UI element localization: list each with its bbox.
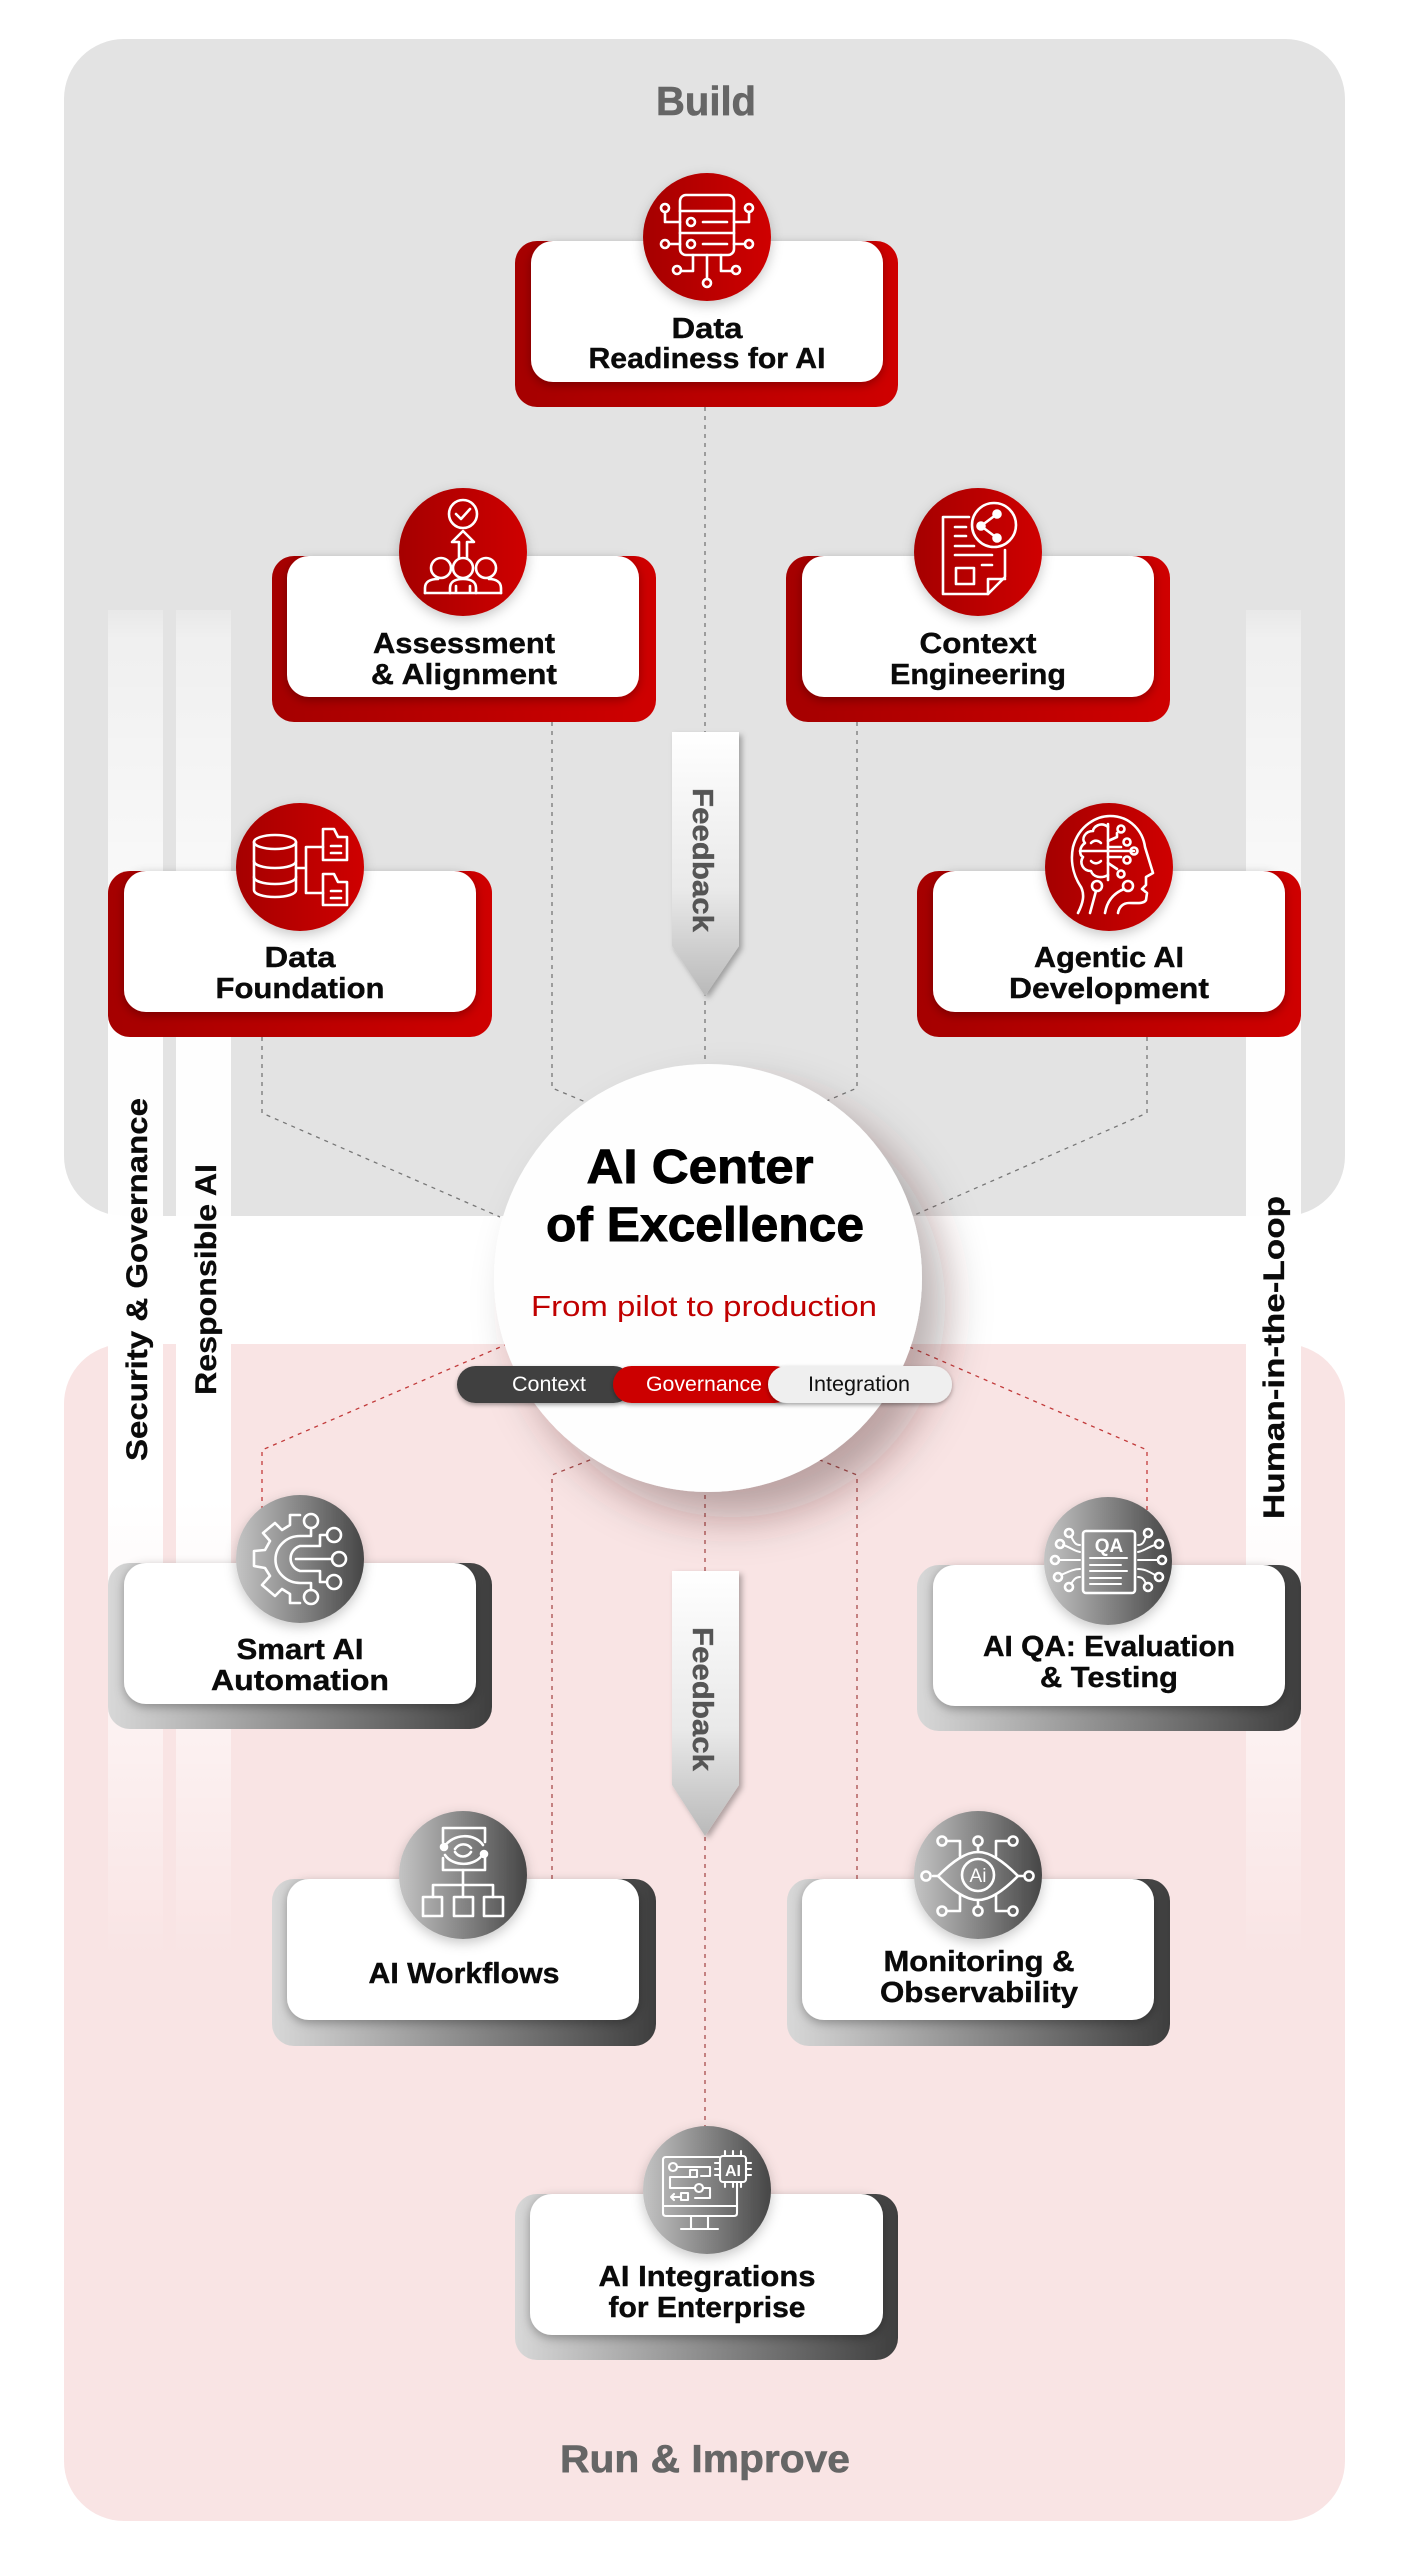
pill bar: Governance — [646, 1373, 762, 1396]
card: AI QA: Evaluation & Testing: & Testing — [1040, 1662, 1178, 1694]
card: Context Engineering: Engineering — [890, 659, 1066, 691]
card: Data Foundation: Foundation — [216, 973, 384, 1005]
arrow: Feedback bottom — [672, 1571, 739, 1836]
icon: AI eye: Ai — [970, 1866, 986, 1887]
icon: AI head — [1072, 816, 1153, 913]
hub circle — [494, 1064, 922, 1492]
card: AI Integrations for Enterprise — [515, 2126, 898, 2360]
arrow: Feedback top — [672, 732, 739, 996]
card: AI Workflows: AI Workflows — [368, 1958, 560, 1990]
card: Data Foundation: Data — [264, 942, 336, 974]
hub title — [546, 1141, 864, 1252]
icon: QA document circuit — [1051, 1529, 1166, 1593]
card: Smart AI Automation: Automation — [211, 1665, 389, 1697]
pill bar: Integration — [808, 1373, 910, 1396]
icon: team with check — [425, 500, 501, 593]
icon: database circuit — [661, 195, 753, 287]
card: Assessment & Alignment: & Alignment — [371, 659, 557, 691]
icon: monitor with AI chip — [663, 2151, 751, 2229]
vertical band: Human-in-the-Loop — [1246, 610, 1301, 1960]
pill bar: Context — [512, 1373, 586, 1396]
card: Agentic AI Development: Development — [1009, 973, 1209, 1005]
label: Security & Governance: Security & Governance — [121, 1098, 154, 1461]
card: Context Engineering — [786, 488, 1170, 722]
vertical band: Responsible AI — [176, 610, 231, 1960]
icon: database and documents — [254, 829, 347, 905]
card: Data Readiness for AI — [515, 173, 898, 407]
icon: AI eye — [922, 1836, 1034, 1916]
vertical band: Security & Governance — [108, 610, 163, 1960]
card: Data Readiness for AI: Readiness for AI — [588, 343, 826, 375]
card: AI Integrations for Enterprise: AI Integrations — [598, 2261, 816, 2293]
connectors: Run & Improve — [262, 1345, 1147, 2130]
label: Human-in-the-Loop: Human-in-the-Loop — [1258, 1196, 1291, 1519]
card: Agentic AI Development — [917, 803, 1301, 1037]
panel: Build — [64, 39, 1345, 1216]
card: Assessment & Alignment — [272, 488, 656, 722]
card: Monitoring & Observability: Observability — [880, 1977, 1078, 2009]
arrow: Feedback bottom: Feedback — [686, 1627, 718, 1772]
card: Smart AI Automation — [108, 1495, 492, 1729]
pill bar — [457, 1366, 952, 1403]
card: AI QA: Evaluation & Testing — [917, 1497, 1301, 1731]
panel: Run & Improve — [64, 1344, 1345, 2521]
hub title: of Excellence — [546, 1199, 864, 1252]
card: Context Engineering: Context — [920, 628, 1037, 660]
center hub — [457, 1064, 952, 1492]
card: Assessment & Alignment: Assessment — [373, 628, 555, 660]
heading: Run & Improve: Run & Improve — [560, 2438, 850, 2481]
hub title: AI Center — [586, 1141, 814, 1194]
card: Monitoring & Observability: Monitoring & — [884, 1946, 1075, 1978]
connectors: Build — [262, 407, 1147, 1217]
label: Responsible AI: Responsible AI — [190, 1164, 223, 1395]
card: Agentic AI Development: Agentic AI — [1034, 942, 1184, 974]
icon: monitor with AI chip: AI — [725, 2163, 741, 2180]
arrow: Feedback top: Feedback — [686, 788, 718, 933]
heading: Build: Build — [656, 78, 756, 124]
icon: QA document circuit: QA — [1095, 1536, 1124, 1557]
icon: gear circuit — [254, 1514, 346, 1604]
card: AI Workflows — [272, 1811, 656, 2046]
icon: workflow tree — [423, 1828, 503, 1916]
card: Smart AI Automation: Smart AI — [236, 1634, 364, 1666]
card: AI QA: Evaluation & Testing: AI QA: Evaluation — [983, 1631, 1235, 1663]
hub subtitle: From pilot to production — [531, 1291, 877, 1323]
card: Data Readiness for AI: Data — [672, 313, 743, 345]
card: Data Foundation — [108, 803, 492, 1037]
card: AI Integrations for Enterprise: for Enterprise — [608, 2292, 806, 2324]
icon: shared document — [943, 503, 1016, 594]
card: Monitoring & Observability — [787, 1811, 1170, 2046]
